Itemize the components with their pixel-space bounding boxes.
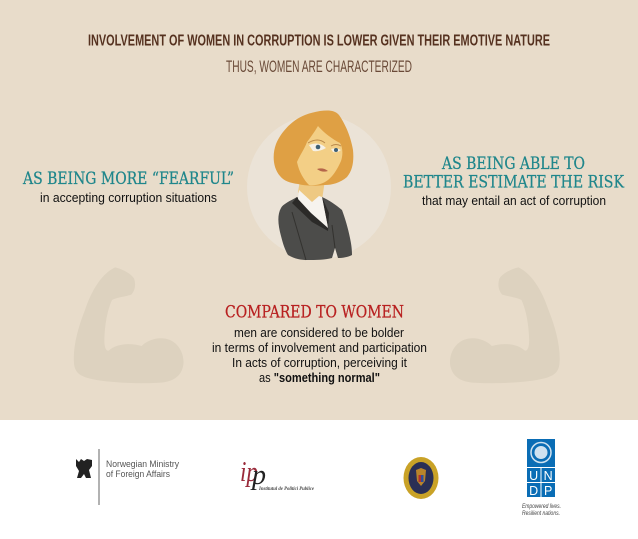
subtitle: THUS, WOMEN ARE CHARACTERIZED xyxy=(226,58,412,76)
brows xyxy=(308,140,341,146)
face xyxy=(297,126,342,185)
jacket seams xyxy=(292,212,335,260)
logo: Norwegian Ministry of Foreign Affairs: Norwegian Ministry xyxy=(106,459,179,470)
logo: UNDP: Resilient nations. xyxy=(522,511,560,517)
lapel xyxy=(292,197,329,231)
logo: Institutul de Politici Publice: p xyxy=(250,460,266,491)
logo: Institutul de Politici Publice xyxy=(240,457,315,492)
hair xyxy=(274,110,353,186)
logo: UNDP: U xyxy=(529,469,538,483)
icon: woman illustration xyxy=(274,110,353,260)
center text block: as "something normal" xyxy=(259,370,380,385)
icon: right flexed arm xyxy=(450,267,560,383)
right heading xyxy=(403,154,625,192)
logo: Norwegian Ministry of Foreign Affairs xyxy=(76,449,179,505)
logo: Moldova seal xyxy=(404,457,438,499)
neck xyxy=(298,180,325,212)
left heading: AS BEING MORE “FEARFUL” xyxy=(22,169,234,188)
logo: UNDP: P xyxy=(544,484,552,498)
blouse xyxy=(298,190,328,228)
logo: Norwegian Ministry of Foreign Affairs: of Foreign Affairs xyxy=(106,469,170,480)
center heading: COMPARED TO WOMEN xyxy=(225,302,404,322)
left description: in accepting corruption situations xyxy=(40,190,217,205)
right description: that may entail an act of corruption xyxy=(422,193,606,208)
logo: UNDP: Empowered lives. xyxy=(522,504,561,510)
logo: Institutul de Politici Publice: ip xyxy=(240,457,258,488)
center text block: in terms of involvement and participation xyxy=(212,340,427,355)
center text block xyxy=(212,325,427,385)
right eye xyxy=(331,148,341,152)
circle behind woman xyxy=(247,115,391,259)
center text block: In acts of corruption, perceiving it xyxy=(232,355,407,370)
logo: Institutul de Politici Publice: Institutul de Politici Publice xyxy=(258,487,315,492)
logo: UNDP: D xyxy=(529,484,538,498)
mouth xyxy=(317,168,328,172)
center text block: men are considered to be bolder xyxy=(234,325,405,340)
icon: lion crest xyxy=(76,459,92,478)
left eye xyxy=(309,144,326,151)
right heading: AS BEING ABLE TO xyxy=(441,154,585,173)
logo: UNDP: N xyxy=(544,469,553,483)
icon: left flexed arm xyxy=(74,267,184,383)
jacket xyxy=(278,197,352,260)
logo: UNDP xyxy=(522,439,561,517)
